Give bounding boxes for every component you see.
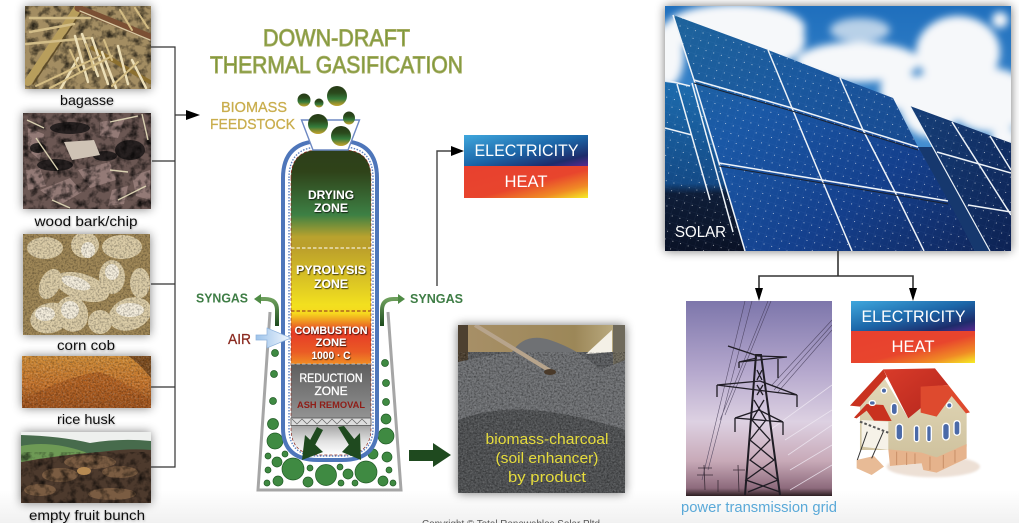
energy box: electricity and heat: ELECTRICITY xyxy=(474,141,578,160)
label: ash removal: ASH REMOVAL xyxy=(297,400,365,411)
photo: power transmission tower xyxy=(686,301,832,496)
zone labels: 1000 · C xyxy=(312,350,351,362)
caption: power transmission grid: power transmission grid xyxy=(681,499,837,516)
label: biomass feedstock: FEEDSTOCK xyxy=(210,116,295,133)
label: biomass feedstock: BIOMASS xyxy=(221,99,287,116)
charcoal caption: biomass-charcoal xyxy=(486,431,608,448)
photo: rice husk xyxy=(22,356,151,408)
hopper xyxy=(302,120,360,150)
label: corn cob: corn cob xyxy=(57,337,115,353)
connector: syngas to electricity xyxy=(437,146,464,286)
charcoal caption xyxy=(486,431,608,486)
photo: corn cob xyxy=(23,232,156,338)
label: bagasse: bagasse xyxy=(60,92,114,108)
arrow: to charcoal by-product xyxy=(409,443,451,467)
zone labels: COMBUSTION xyxy=(294,325,368,337)
charcoal caption: by product xyxy=(508,469,587,486)
grate xyxy=(291,418,371,426)
zone labels: ZONE xyxy=(314,279,348,291)
syngas pipe right xyxy=(382,294,405,326)
arrows: charcoal falling out of reactor xyxy=(302,426,361,460)
tower structure xyxy=(717,346,797,495)
reactor column: REDUCTION xyxy=(300,373,362,385)
title xyxy=(210,25,463,79)
energy box: electricity and heat (solar): ELECTRICITY xyxy=(862,307,966,326)
zone labels: DRYING xyxy=(308,190,354,202)
connector bracket: feedstocks to gasifier xyxy=(151,47,200,467)
label: rice husk: rice husk xyxy=(57,411,116,427)
illustration: house xyxy=(850,368,980,477)
zone labels: ZONE xyxy=(316,337,346,349)
reactor column: ZONE xyxy=(314,386,348,398)
energy box: electricity and heat (solar) xyxy=(851,301,975,363)
label: wood bark/chip: wood bark/chip xyxy=(33,213,138,229)
photo: wood bark/chip xyxy=(23,113,151,209)
charcoal caption: (soil enhancer) xyxy=(496,450,598,467)
photo: bagasse xyxy=(25,5,151,90)
arrow: air intake xyxy=(256,328,291,348)
reactor column xyxy=(283,141,377,460)
reactor zones fill xyxy=(291,150,371,455)
zone dividers xyxy=(291,248,371,364)
photo: biomass charcoal xyxy=(458,325,625,493)
title: DOWN-DRAFT xyxy=(263,25,410,52)
photo: empty fruit bunch xyxy=(21,432,151,503)
biomass pellets in vessel xyxy=(264,350,396,487)
label: empty fruit bunch: empty fruit bunch xyxy=(29,507,145,523)
power lines xyxy=(702,301,832,480)
outer vessel xyxy=(258,312,401,490)
label: syngas left: SYNGAS xyxy=(196,290,248,306)
page background fade xyxy=(0,490,1019,523)
photo: solar panels xyxy=(652,4,1019,251)
energy box: electricity and heat xyxy=(464,135,588,198)
title: THERMAL GASIFICATION xyxy=(210,52,463,79)
biomass pieces falling into hopper xyxy=(298,86,355,146)
energy box: electricity and heat (solar): HEAT xyxy=(892,337,934,356)
label: syngas right: SYNGAS xyxy=(410,291,463,306)
zone labels: ZONE xyxy=(314,203,348,215)
label: solar: SOLAR xyxy=(675,224,726,241)
energy box: electricity and heat: HEAT xyxy=(504,172,548,191)
label: air: AIR xyxy=(228,331,251,348)
zone labels: PYROLYSIS xyxy=(296,265,366,277)
label: biomass feedstock xyxy=(210,99,295,133)
distant towers xyxy=(697,465,745,492)
syngas pipe left xyxy=(254,294,277,326)
zone labels xyxy=(294,190,368,362)
connector: solar to grid and energy box xyxy=(755,251,917,301)
